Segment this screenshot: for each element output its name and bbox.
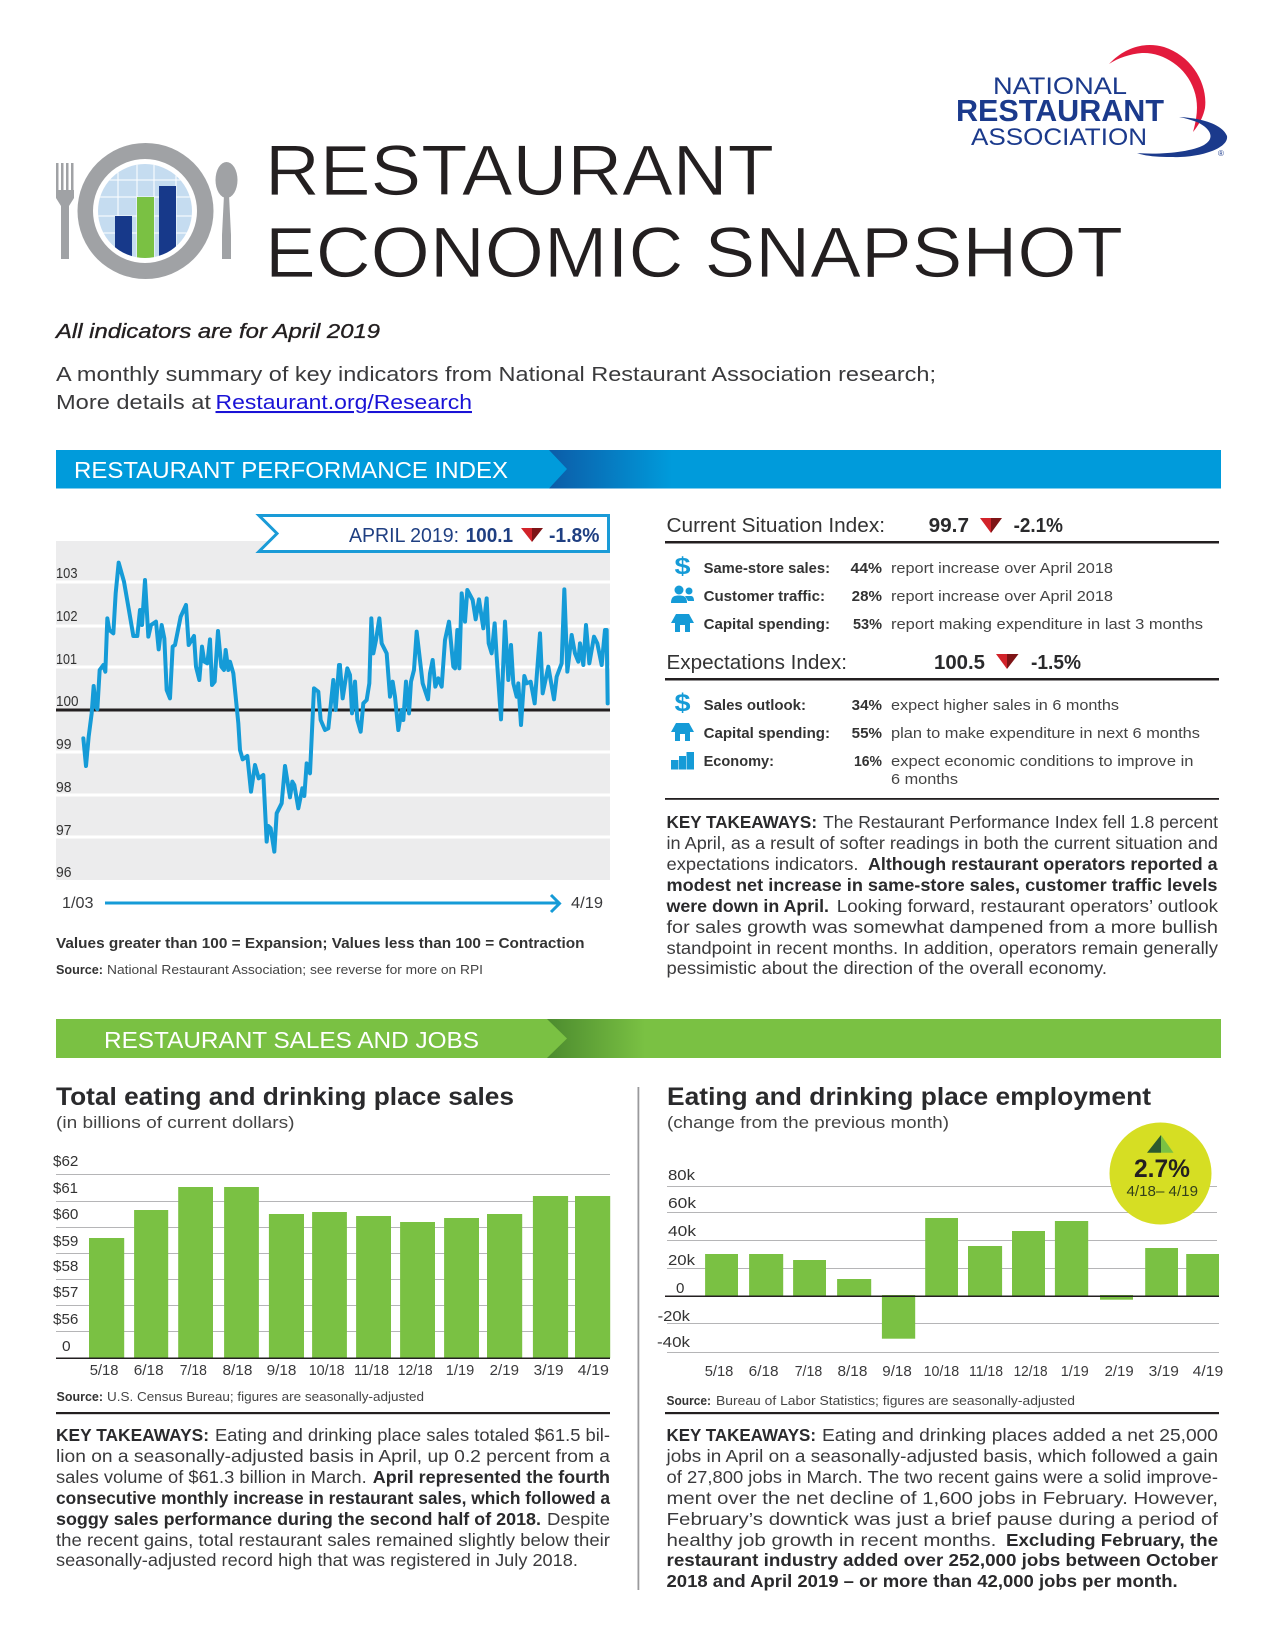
logo: National Restaurant Association: ASSOCIATION — [971, 124, 1147, 151]
text block: employment key takeaways: of 27,800 jobs in March. The two recent gains were a solid improve- — [666, 1467, 1218, 1487]
text block: employment key takeaways: KEY TAKEAWAYS: — [666, 1425, 816, 1445]
text block: sales key takeaways: Eating and drinking place sales totaled $61.5 bil- — [215, 1425, 610, 1445]
source: census: U.S. Census Bureau; figures are seasonally-adjusted — [107, 1389, 424, 1404]
icon: rising bars — [671, 752, 694, 770]
y axis labels: $59 — [53, 1233, 78, 1250]
icon: fork — [56, 163, 74, 259]
x axis labels: 3/19 — [1149, 1363, 1179, 1380]
icon: dollar: $ — [674, 689, 691, 717]
source: BLS: Source: — [666, 1393, 711, 1408]
text block: RPI key takeaways: The Restaurant Performance Index fell 1.8 percent — [823, 812, 1218, 832]
text block: sales key takeaways: April represented the fourth — [373, 1467, 610, 1487]
text block: employment key takeaways — [665, 1425, 1218, 1591]
text block: RPI key takeaways: were down in April. — [665, 896, 829, 916]
text block: RPI key takeaways: Although restaurant operators reported a — [868, 854, 1218, 874]
source: BLS — [665, 1393, 1219, 1414]
intro text: Restaurant.org/Research — [216, 391, 472, 414]
x axis labels: 5/18 — [705, 1363, 733, 1380]
panel: expectations index: expect higher sales in 6 months — [891, 697, 1119, 714]
chart note: National Restaurant Association; see reverse for more on RPI — [107, 962, 483, 977]
text block: RPI key takeaways: pessimistic about the direction of the overall economy. — [666, 958, 1107, 978]
x axis labels: 6/18 — [749, 1363, 779, 1380]
text block: employment key takeaways: ment over the net decline of 1,600 jobs in February. However, — [666, 1488, 1218, 1508]
icon: plate — [78, 143, 214, 279]
panel: expectations index: Capital spending: — [704, 725, 830, 742]
y axis labels: 103 — [56, 565, 78, 582]
x axis labels: 5/18 — [90, 1362, 118, 1379]
x axis labels: 8/18 — [222, 1362, 252, 1379]
x axis labels: 8/18 — [838, 1363, 867, 1380]
x axis labels: 11/18 — [969, 1363, 1003, 1380]
x axis labels: 7/18 — [795, 1363, 822, 1380]
time axis arrow — [62, 895, 603, 912]
y axis labels: 60k — [668, 1195, 697, 1212]
y axis labels: $60 — [53, 1206, 78, 1223]
column divider — [638, 1087, 639, 1590]
icon: customers — [671, 586, 694, 603]
chart note: Source: — [56, 962, 103, 977]
x axis labels: 6/18 — [134, 1362, 164, 1379]
panel: expectations index: 55% — [852, 725, 882, 742]
time axis arrow: 1/03 — [62, 895, 94, 912]
y axis labels: -20k — [658, 1308, 691, 1325]
time axis arrow: 4/19 — [571, 895, 603, 912]
panel: current situation index: report increase over April 2018 — [891, 560, 1113, 577]
callout: April 2019 value: 100.1 — [466, 525, 513, 547]
intro text: More details at — [56, 391, 211, 414]
callout: 2.7% employment growth — [1110, 1122, 1212, 1224]
x axis labels: 11/18 — [354, 1362, 389, 1379]
y axis labels: 99 — [56, 736, 72, 753]
icon: dollar: $ — [674, 553, 691, 580]
y axis labels: -40k — [657, 1334, 691, 1351]
line chart: restaurant performance index — [56, 516, 610, 912]
panel: current situation index: report making expenditure in last 3 months — [891, 616, 1203, 633]
y axis labels: 97 — [56, 822, 72, 839]
source: census — [56, 1389, 610, 1414]
panel: expectations index: 16% — [854, 753, 882, 770]
y axis labels — [53, 1153, 78, 1355]
text block: RPI key takeaways: standpoint in recent months. In addition, operators remain generally — [666, 938, 1218, 958]
icon: plate with bar chart, fork and spoon — [56, 143, 238, 279]
icon: spoon — [216, 162, 238, 259]
section band: restaurant sales and jobs — [56, 1019, 1221, 1058]
y axis labels: $57 — [53, 1284, 78, 1301]
text block: sales key takeaways: consecutive monthly increase in restaurant sales, which followed a — [56, 1488, 610, 1508]
panel: expectations index: -1.5% — [1031, 652, 1081, 674]
text block: employment key takeaways: Excluding February, the — [1006, 1530, 1218, 1550]
text block: sales key takeaways: Despite — [547, 1509, 610, 1529]
heading: total sales: (in billions of current dollars) — [56, 1113, 294, 1132]
bar chart: total sales — [53, 1153, 610, 1379]
panel: current situation index: 99.7 — [929, 515, 969, 537]
panel: current situation index: 53% — [853, 616, 882, 633]
bars — [89, 1187, 610, 1358]
text block: sales key takeaways: lion on a seasonally-adjusted basis in April, up 0.2 percent from a — [56, 1446, 610, 1466]
source: BLS: Bureau of Labor Statistics; figures are seasonally-adjusted — [716, 1393, 1075, 1408]
section band: restaurant performance index — [56, 450, 1221, 488]
source: census: Source: — [56, 1389, 103, 1404]
y axis labels: 20k — [668, 1252, 696, 1269]
text block: employment key takeaways: Eating and drinking places added a net 25,000 — [822, 1425, 1218, 1445]
text block: RPI key takeaways: modest net increase in same-store sales, customer traffic levels — [666, 875, 1218, 895]
x axis labels: 2/19 — [490, 1362, 519, 1379]
panel: current situation index: -2.1% — [1014, 515, 1063, 537]
y axis labels — [657, 1167, 697, 1351]
y axis labels — [56, 565, 78, 881]
data line — [83, 563, 608, 852]
panel: current situation index: Customer traffic: — [704, 588, 825, 605]
panel: expectations index: Expectations Index: — [666, 652, 847, 674]
title: ECONOMIC SNAPSHOT — [265, 214, 1123, 293]
x axis labels: 10/18 — [309, 1362, 345, 1379]
x axis labels — [705, 1363, 1223, 1380]
y axis labels: 98 — [56, 779, 72, 796]
heading: employment: Eating and drinking place employment — [667, 1083, 1152, 1111]
icon: building — [671, 723, 694, 741]
x axis labels: 4/19 — [578, 1362, 609, 1379]
chart note — [56, 935, 584, 977]
y axis labels: $58 — [53, 1258, 78, 1275]
text block: employment key takeaways: February’s downtick was just a brief pause during a period of — [666, 1509, 1218, 1529]
intro text: A monthly summary of key indicators from National Restaurant Association research; — [56, 363, 936, 386]
logo: National Restaurant Association: RESTAURANT — [956, 93, 1164, 128]
text block: RPI key takeaways: in April, as a result of softer readings in both the current situation and — [666, 833, 1218, 853]
x axis labels: 2/19 — [1105, 1363, 1134, 1380]
text block: sales key takeaways: soggy sales performance during the second half of 2018. — [56, 1509, 541, 1529]
text block: RPI key takeaways: Looking forward, restaurant operators’ outlook — [837, 896, 1218, 916]
text block: RPI key takeaways: KEY TAKEAWAYS: — [666, 812, 817, 832]
y axis labels: 102 — [56, 608, 78, 625]
callout: April 2019 value: APRIL 2019: — [349, 525, 459, 547]
heading: total sales: Total eating and drinking place sales — [56, 1083, 514, 1111]
section band: restaurant sales and jobs: RESTAURANT SALES AND JOBS — [104, 1027, 479, 1053]
panel: expectations index: Sales outlook: — [704, 697, 806, 714]
panel: current situation index: report increase over April 2018 — [891, 588, 1113, 605]
icon: building — [671, 614, 694, 632]
text block: employment key takeaways: restaurant industry added over 252,000 jobs between October — [666, 1550, 1218, 1570]
bars — [705, 1218, 1219, 1339]
x axis labels: 4/19 — [1193, 1363, 1223, 1380]
heading: employment: (change from the previous month) — [667, 1113, 949, 1132]
panel: expectations index: Economy: — [704, 753, 774, 770]
panel: current situation index: Current Situation Index: — [666, 515, 885, 537]
panel: current situation index: 28% — [852, 588, 882, 605]
panel: current situation index — [665, 515, 1219, 633]
panel: expectations index — [665, 652, 1219, 800]
x axis labels: 12/18 — [398, 1362, 433, 1379]
callout: 2.7% employment growth: 4/18– 4/19 — [1126, 1183, 1198, 1200]
y axis labels: 80k — [668, 1167, 696, 1184]
text block: RPI key takeaways — [665, 812, 1218, 978]
panel: expectations index: expect economic conditions to improve in — [891, 753, 1194, 770]
text block: RPI key takeaways: for sales growth was somewhat dampened from a more bullish — [666, 917, 1218, 937]
intro text — [54, 320, 936, 414]
x axis labels: 9/18 — [882, 1363, 912, 1380]
bar chart: employment — [657, 1122, 1223, 1380]
panel: expectations index: 100.5 — [934, 652, 985, 674]
callout: April 2019 value: -1.8% — [549, 525, 600, 547]
callout: 2.7% employment growth: 2.7% — [1134, 1155, 1190, 1183]
panel: current situation index: Capital spending: — [704, 616, 830, 633]
text block: RPI key takeaways: expectations indicators. — [666, 854, 858, 874]
x axis labels: 1/19 — [446, 1362, 474, 1379]
panel: expectations index: 34% — [852, 697, 882, 714]
title: RESTAURANT — [265, 132, 774, 211]
section band: restaurant performance index: RESTAURANT PERFORMANCE INDEX — [74, 457, 508, 483]
logo: National Restaurant Association — [956, 45, 1227, 158]
y axis labels: $61 — [53, 1180, 78, 1197]
x axis labels — [90, 1362, 609, 1379]
panel: expectations index: plan to make expenditure in next 6 months — [891, 725, 1200, 742]
heading: total sales — [56, 1083, 514, 1132]
y axis labels: 100 — [56, 693, 78, 710]
x axis labels: 10/18 — [924, 1363, 959, 1380]
y axis labels: 0 — [676, 1280, 684, 1297]
text block: sales key takeaways: KEY TAKEAWAYS: — [56, 1425, 209, 1445]
text block: sales key takeaways: sales volume of $61.3 billion in March. — [56, 1467, 367, 1487]
panel: current situation index: 44% — [850, 560, 882, 577]
text block: sales key takeaways — [56, 1425, 610, 1570]
y axis labels: 96 — [56, 864, 72, 881]
heading: employment — [667, 1083, 1152, 1132]
chart note: Values greater than 100 = Expansion; Values less than 100 = Contraction — [56, 935, 584, 952]
text block: sales key takeaways: seasonally-adjusted record high that was registered in July 2018. — [56, 1550, 578, 1570]
title — [265, 132, 1123, 293]
logo: National Restaurant Association: NATIONAL — [993, 73, 1127, 100]
x axis labels: 7/18 — [180, 1362, 207, 1379]
panel: current situation index: Same-store sales: — [704, 560, 830, 577]
y axis labels: 101 — [56, 651, 77, 668]
x axis labels: 1/19 — [1061, 1363, 1089, 1380]
x axis labels: 12/18 — [1014, 1363, 1048, 1380]
text block: employment key takeaways: jobs in April on a seasonally-adjusted basis, which followed a gain — [665, 1446, 1218, 1466]
y axis labels: $56 — [53, 1311, 78, 1328]
logo: National Restaurant Association: ® — [1218, 149, 1224, 158]
intro text: All indicators are for April 2019 — [54, 320, 380, 343]
x axis labels: 9/18 — [267, 1362, 296, 1379]
y axis labels: $62 — [53, 1153, 78, 1170]
x axis labels: 3/19 — [534, 1362, 564, 1379]
panel: expectations index: 6 months — [891, 771, 958, 788]
callout: April 2019 value — [259, 516, 608, 552]
y axis labels: 40k — [668, 1223, 697, 1240]
text block: employment key takeaways: 2018 and April 2019 – or more than 42,000 jobs per month. — [666, 1571, 1178, 1591]
text block: sales key takeaways: the recent gains, total restaurant sales remained slightly below their — [56, 1530, 610, 1550]
y axis labels: 0 — [62, 1338, 71, 1355]
text block: employment key takeaways: healthy job growth in recent months. — [666, 1530, 996, 1550]
